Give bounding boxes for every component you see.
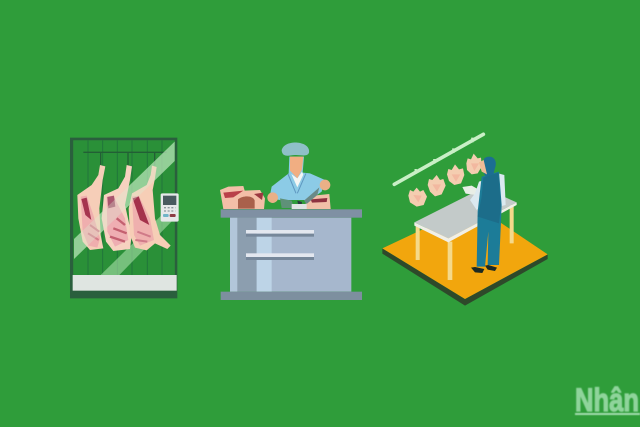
table (414, 188, 517, 280)
meat pile left (220, 186, 265, 209)
panel: poultry processing line (382, 134, 548, 306)
conveyor rail (394, 134, 483, 184)
hanging carcass 3 (129, 166, 171, 250)
panel: meat display case (70, 138, 179, 298)
meat and knife right (280, 187, 331, 209)
case frame (70, 138, 177, 298)
glass reflection over meat (74, 142, 175, 259)
watermark logo: Nhân (575, 383, 639, 419)
glass reflections (74, 142, 175, 275)
butcher (267, 143, 330, 203)
panel: butcher at counter (220, 143, 362, 300)
hanging carcass 1 (77, 165, 105, 250)
control panel (161, 193, 179, 222)
counter (221, 209, 362, 300)
base panel (73, 275, 177, 291)
worker (462, 157, 506, 273)
hanging carcass 2 (102, 165, 132, 251)
orange platform (382, 205, 548, 306)
hanging chickens (408, 154, 482, 207)
